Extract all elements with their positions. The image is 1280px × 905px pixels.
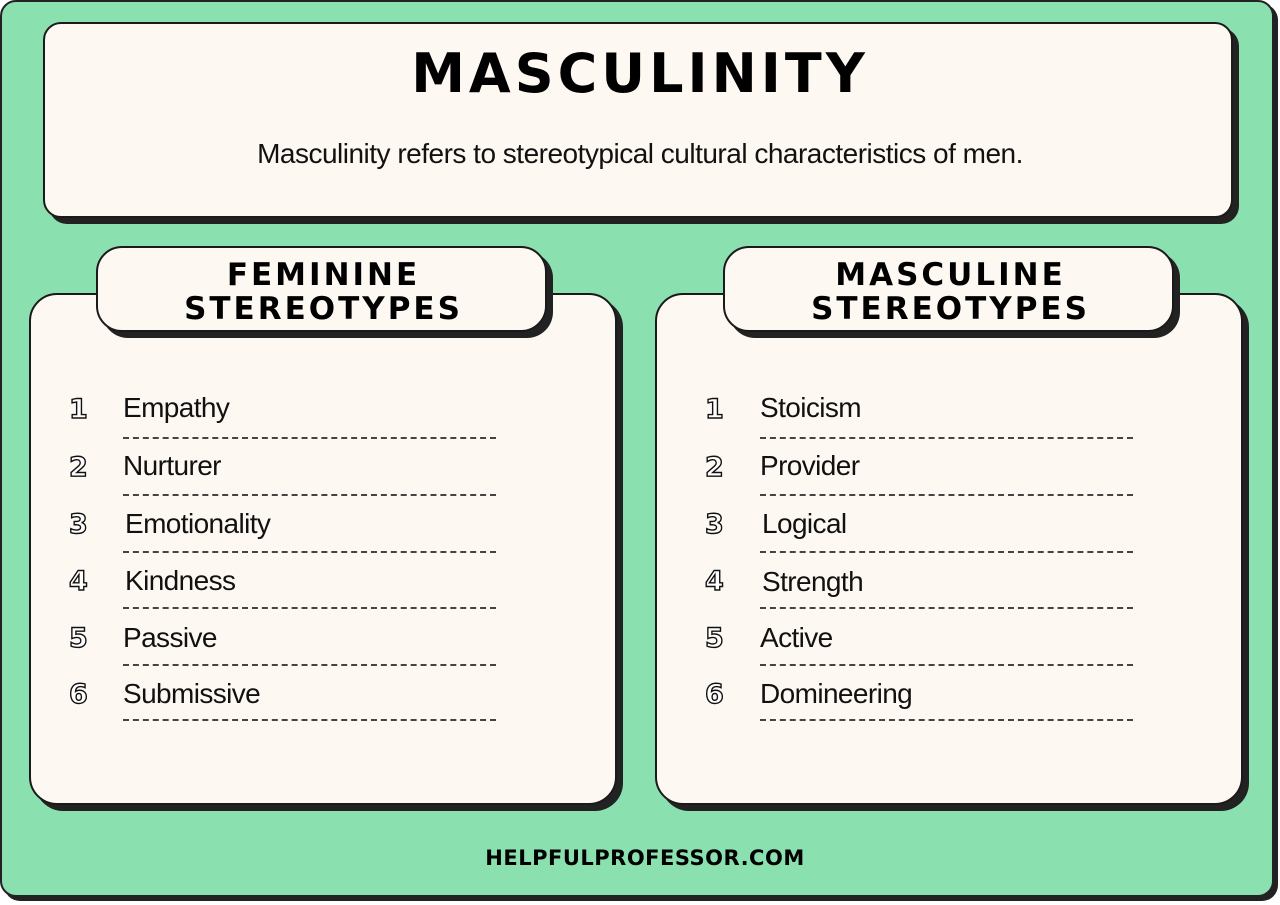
list: feminine: Nurturer: [123, 450, 221, 481]
panel: masculine stereotypes: [655, 293, 1243, 805]
title: MASCULINITY: [411, 42, 869, 105]
subtitle: Masculinity refers to stereotypical cultural characteristics of men.: [257, 138, 1023, 169]
list: feminine: Emotionality: [125, 508, 270, 539]
list: masculine: Strength: [762, 566, 863, 597]
list: masculine: Stoicism: [760, 392, 861, 423]
list: masculine: 2: [705, 452, 724, 483]
list: feminine: Kindness: [125, 565, 235, 596]
tab: feminine heading: FEMININE: [227, 257, 420, 293]
tab: masculine heading: STEREOTYPES: [811, 291, 1090, 327]
list: masculine: 4: [705, 566, 724, 597]
list: masculine: 5: [705, 623, 724, 654]
list: masculine: Active: [760, 622, 833, 653]
list: feminine: 2: [69, 452, 88, 483]
tab: masculine heading: MASCULINE: [835, 257, 1066, 293]
list: feminine: 3: [69, 509, 88, 540]
list: masculine: 1: [705, 394, 724, 425]
list: feminine: [69, 392, 496, 721]
tab: masculine heading: [723, 246, 1174, 332]
list: masculine: 6: [705, 679, 724, 710]
tab: feminine heading: [96, 246, 547, 332]
list: feminine: Passive: [123, 622, 217, 653]
list: masculine: [705, 392, 1133, 721]
footer: HELPFULPROFESSOR.COM: [485, 846, 805, 870]
list: feminine: Submissive: [123, 678, 260, 709]
list: masculine: Logical: [762, 508, 847, 539]
panel: feminine stereotypes: [29, 293, 617, 805]
list: feminine: 6: [69, 679, 88, 710]
list: feminine: 1: [69, 394, 88, 425]
tab: feminine heading: STEREOTYPES: [184, 291, 463, 327]
list: feminine: 4: [69, 566, 88, 597]
list: masculine: Domineering: [760, 678, 912, 709]
list: masculine: 3: [705, 509, 724, 540]
header panel: [43, 22, 1233, 218]
list: masculine: Provider: [760, 450, 859, 481]
list: feminine: 5: [69, 623, 88, 654]
list: feminine: Empathy: [123, 392, 229, 423]
